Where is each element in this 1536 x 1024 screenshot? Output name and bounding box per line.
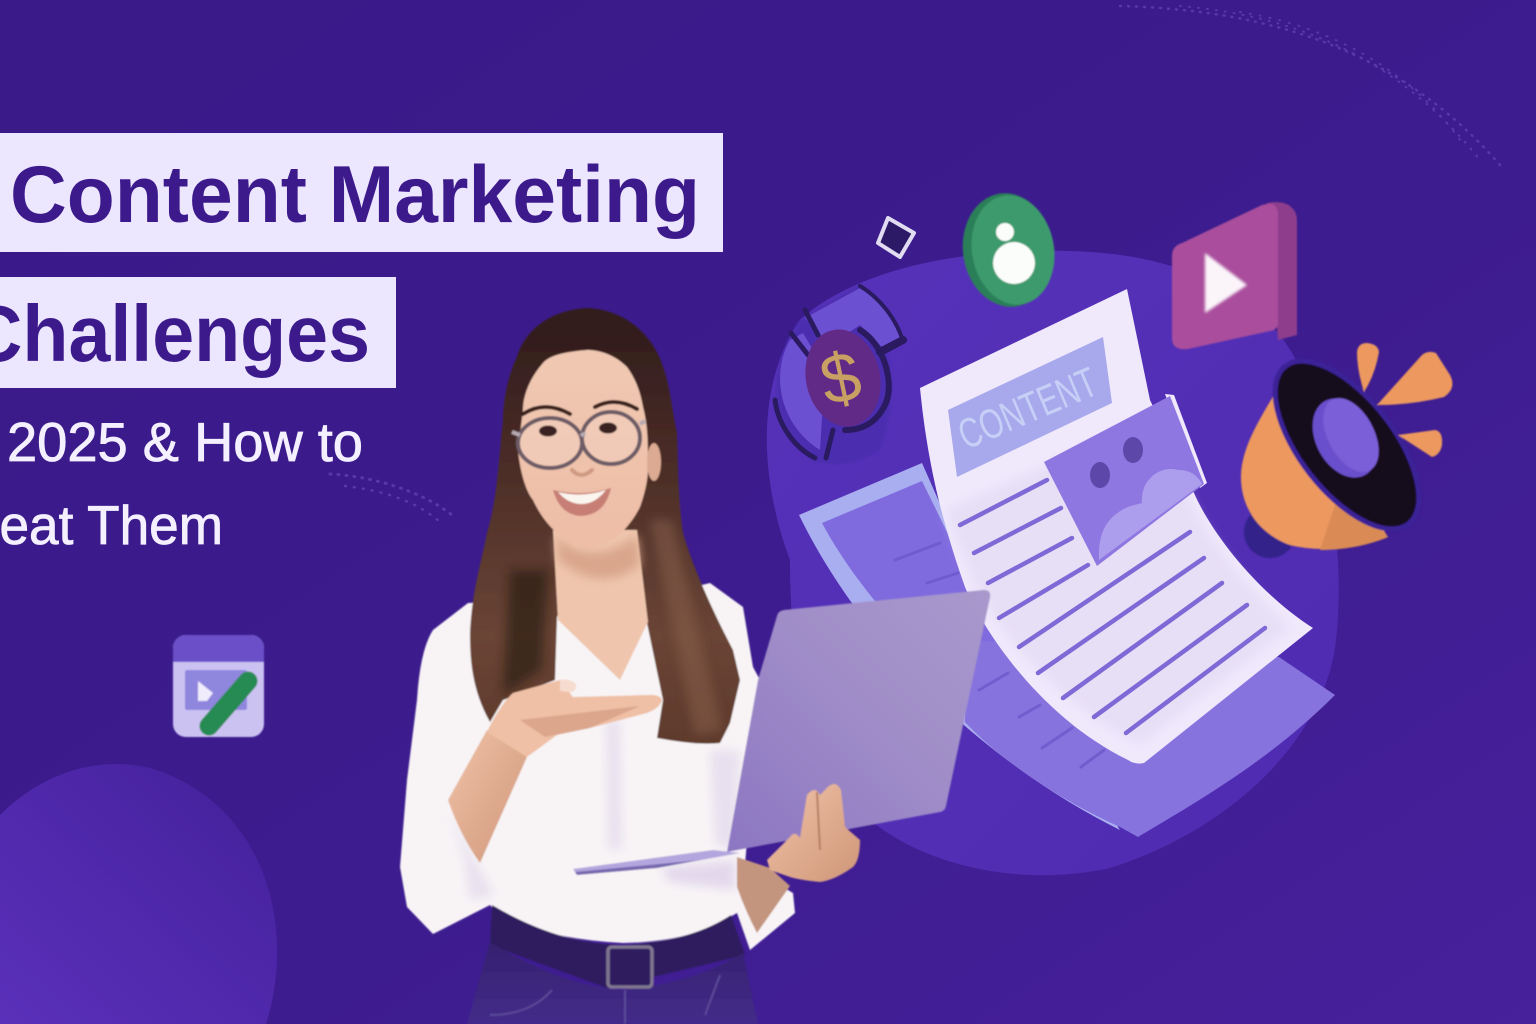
hair xyxy=(470,308,740,744)
content label xyxy=(948,337,1112,477)
laptop lid xyxy=(727,590,990,852)
illustration blob xyxy=(767,251,1339,875)
image card xyxy=(1044,394,1207,566)
nose xyxy=(572,470,592,475)
dollar coin with arcs xyxy=(775,285,903,464)
raised arm and open hand xyxy=(448,680,662,863)
jeans seam xyxy=(490,975,720,1024)
content label: CONTENT xyxy=(951,358,1104,458)
laptop base xyxy=(573,850,740,875)
neck and chest xyxy=(553,530,648,680)
shirt shading xyxy=(448,720,740,900)
ear xyxy=(647,443,661,481)
supporting hand xyxy=(767,784,860,882)
megaphone sound rays xyxy=(1357,343,1452,457)
jeans xyxy=(467,942,758,1024)
belt xyxy=(490,905,745,988)
diamond icon xyxy=(878,218,914,257)
green person badge xyxy=(956,187,1063,313)
back document sheet xyxy=(799,463,1335,837)
main content page xyxy=(920,289,1313,764)
dollar coin with arcs: $ xyxy=(813,336,868,420)
subtitle: 2025 & How to xyxy=(7,411,363,473)
faint back-sheet lines xyxy=(895,543,1104,767)
subtitle xyxy=(0,411,363,556)
smile xyxy=(553,488,611,516)
glasses xyxy=(512,412,645,468)
eyes and brows xyxy=(523,402,637,436)
hair strands xyxy=(503,520,722,735)
right forearm xyxy=(737,857,790,933)
bottom-left blob xyxy=(0,764,277,1024)
megaphone xyxy=(1241,337,1452,558)
icon: calendar video with green check xyxy=(173,635,264,737)
video play tile xyxy=(1172,202,1297,349)
face xyxy=(518,350,648,548)
text lines xyxy=(960,480,1265,733)
title banner: Content Marketing: Content Marketing xyxy=(10,150,700,240)
shirt xyxy=(400,583,795,950)
belt buckle xyxy=(608,947,652,987)
decorative dotted arcs xyxy=(330,6,1500,522)
woman xyxy=(400,308,990,1024)
